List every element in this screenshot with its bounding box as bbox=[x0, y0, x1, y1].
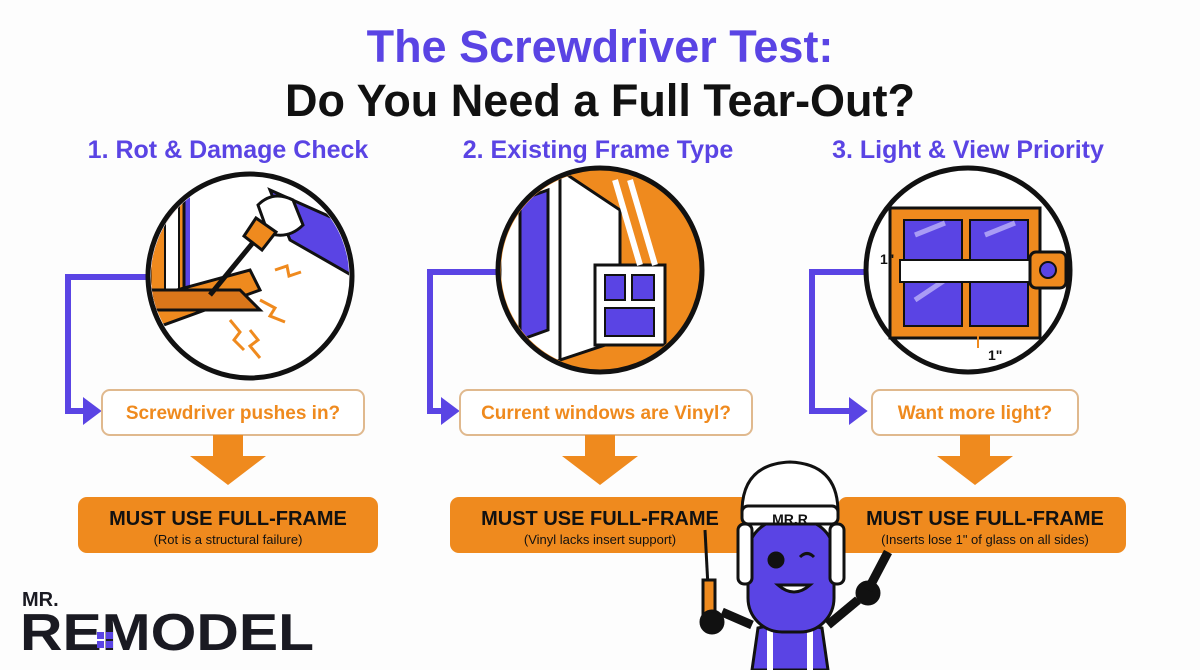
heading: column 2: 2. Existing Frame Type bbox=[463, 136, 733, 164]
title: Do You Need a Full Tear-Out? bbox=[285, 75, 915, 126]
result box 1: (Rot is a structural failure) bbox=[154, 532, 302, 547]
arrow: down 3 bbox=[937, 435, 1013, 485]
icon: frame cross-section circle bbox=[498, 168, 702, 380]
arrow: connector 1 bbox=[68, 277, 152, 423]
result box 3: (Inserts lose 1" of glass on all sides) bbox=[881, 532, 1089, 547]
result box 1: MUST USE FULL-FRAME bbox=[109, 508, 347, 530]
icon: rot check circle bbox=[146, 172, 354, 380]
logo: MR. bbox=[22, 589, 59, 611]
arrow: connector 3 bbox=[812, 272, 868, 423]
title: The Screwdriver Test: bbox=[367, 21, 833, 72]
question box 2: Current windows are Vinyl? bbox=[481, 403, 731, 424]
result box 1 bbox=[78, 497, 378, 553]
title bbox=[285, 21, 915, 126]
text: MR.R bbox=[772, 511, 808, 527]
mascot bbox=[701, 462, 888, 670]
result box 2: (Vinyl lacks insert support) bbox=[524, 532, 676, 547]
arrow: connector 2 bbox=[430, 272, 500, 423]
question box 3 bbox=[872, 390, 1078, 435]
logo: REMODEL bbox=[20, 604, 314, 662]
result box 3: MUST USE FULL-FRAME bbox=[866, 508, 1104, 530]
question box 1: Screwdriver pushes in? bbox=[126, 403, 340, 424]
heading: column 1: 1. Rot & Damage Check bbox=[88, 136, 368, 164]
result box 3 bbox=[838, 497, 1126, 553]
arrow: down 1 bbox=[190, 435, 266, 485]
icon: measuring window circle: 1" bbox=[988, 347, 1002, 363]
icon: measuring window circle: 1" bbox=[880, 251, 894, 267]
result box 2 bbox=[450, 497, 750, 553]
question box 1 bbox=[102, 390, 364, 435]
icon: measuring window circle bbox=[866, 168, 1070, 372]
question box 3: Want more light? bbox=[898, 403, 1052, 424]
question box 2 bbox=[460, 390, 752, 435]
heading: column 3: 3. Light & View Priority bbox=[832, 136, 1104, 164]
result box 2: MUST USE FULL-FRAME bbox=[481, 508, 719, 530]
arrow: down 2 bbox=[562, 435, 638, 485]
